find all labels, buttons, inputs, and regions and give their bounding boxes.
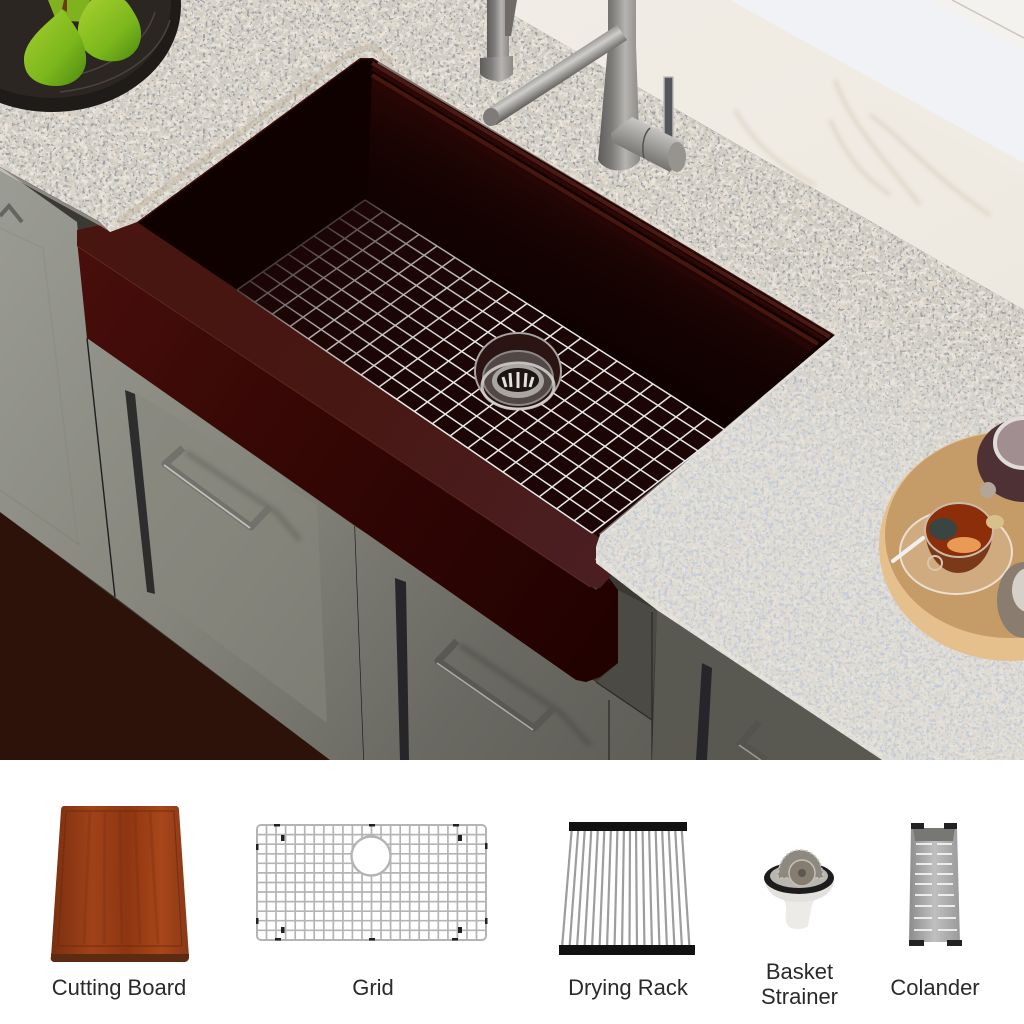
cabinet: middle door with handle <box>87 338 364 760</box>
rim ledges <box>137 58 835 349</box>
farmhouse sink: brown <box>77 58 835 682</box>
glass jar <box>997 562 1024 638</box>
wooden tray with tea set <box>879 418 1024 661</box>
accessory: cutting board <box>51 806 189 962</box>
pear back <box>48 0 90 22</box>
mixer handle <box>611 117 685 172</box>
handle shadow <box>186 452 300 540</box>
countertop: granite <box>0 0 1024 760</box>
label: colander: Colander <box>890 975 980 1000</box>
pear right <box>78 0 141 61</box>
label: drying rack: Drying Rack <box>568 975 689 1000</box>
fruit plate with pears <box>0 0 181 112</box>
cabinet: far right door with handle <box>652 610 882 761</box>
drain strainer <box>475 333 561 409</box>
label: basket strainer: Basket <box>766 959 833 984</box>
tea cup <box>925 503 1004 573</box>
label: basket strainer: Strainer <box>761 984 838 1009</box>
label: grid: Grid <box>352 975 394 1000</box>
accessory: drying rack <box>559 822 695 955</box>
faucet body and spout <box>483 0 686 172</box>
teapot <box>977 418 1024 502</box>
accessory: basket strainer <box>764 850 834 929</box>
sink floor <box>237 200 725 538</box>
panel: kitchen scene photo <box>0 0 1024 761</box>
handle <box>164 448 270 528</box>
apron front <box>77 240 618 682</box>
cabinet side beside the apron <box>596 590 657 720</box>
backsplash and window sill <box>487 0 1024 310</box>
sink interior <box>138 60 834 409</box>
saucer <box>900 510 1012 594</box>
floor <box>0 512 330 760</box>
pull-down faucet head <box>480 0 517 81</box>
handle <box>437 641 554 730</box>
lever <box>664 77 673 143</box>
cabinet: lower right door with handle <box>355 526 657 760</box>
spoon <box>893 538 923 561</box>
accessory: grid <box>256 824 488 940</box>
cabinet: left door with handle <box>0 167 115 597</box>
pear left <box>24 9 86 86</box>
interior back wall <box>370 78 816 364</box>
polished counter edges <box>0 46 882 757</box>
apron top face <box>77 222 612 588</box>
accessory: colander <box>909 823 962 946</box>
groove <box>125 390 155 594</box>
label: cutting board: Cutting Board <box>52 975 186 1000</box>
stainless grid in sink <box>237 200 725 533</box>
